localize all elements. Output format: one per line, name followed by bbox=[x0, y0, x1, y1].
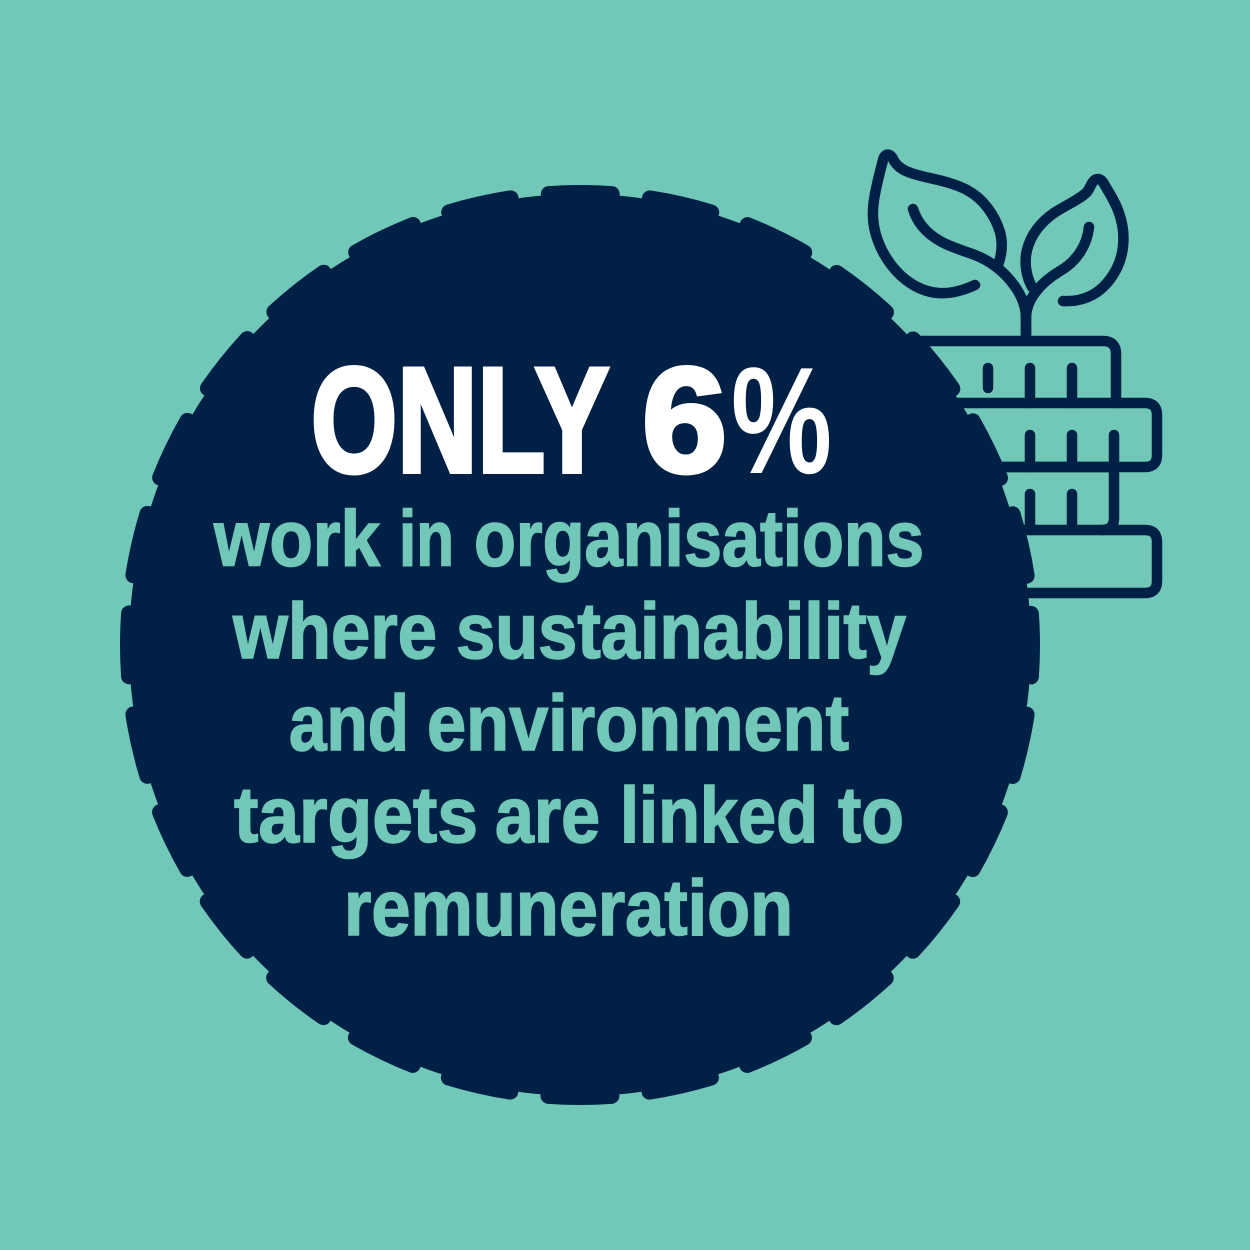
heading: only 6%: 6 bbox=[642, 336, 727, 504]
text block: description: remuneration bbox=[344, 863, 793, 952]
text block: description: to bbox=[838, 770, 904, 859]
text block: description: in bbox=[399, 494, 454, 582]
icon: plant growing from coin stack bbox=[873, 155, 1157, 593]
text block: description: sustainability bbox=[456, 586, 906, 675]
panel: notched navy circle bbox=[128, 193, 1032, 1097]
text block: description: linked bbox=[620, 770, 818, 859]
text block: description: targets bbox=[234, 770, 478, 859]
text block: description: where bbox=[232, 586, 437, 675]
icon: right leaf bbox=[1026, 179, 1123, 340]
heading: only 6%: % bbox=[731, 336, 832, 506]
heading: only 6%: ONLY bbox=[311, 336, 609, 504]
text block: description bbox=[213, 494, 924, 952]
text block: description: are bbox=[495, 770, 600, 859]
text block: description: and bbox=[289, 678, 409, 767]
text block: description: work bbox=[213, 494, 381, 582]
text block: description: environment bbox=[427, 678, 849, 767]
icon: left leaf bbox=[873, 155, 1026, 340]
text block: description: organisations bbox=[474, 494, 924, 582]
icon: coin stack bbox=[900, 341, 1157, 593]
